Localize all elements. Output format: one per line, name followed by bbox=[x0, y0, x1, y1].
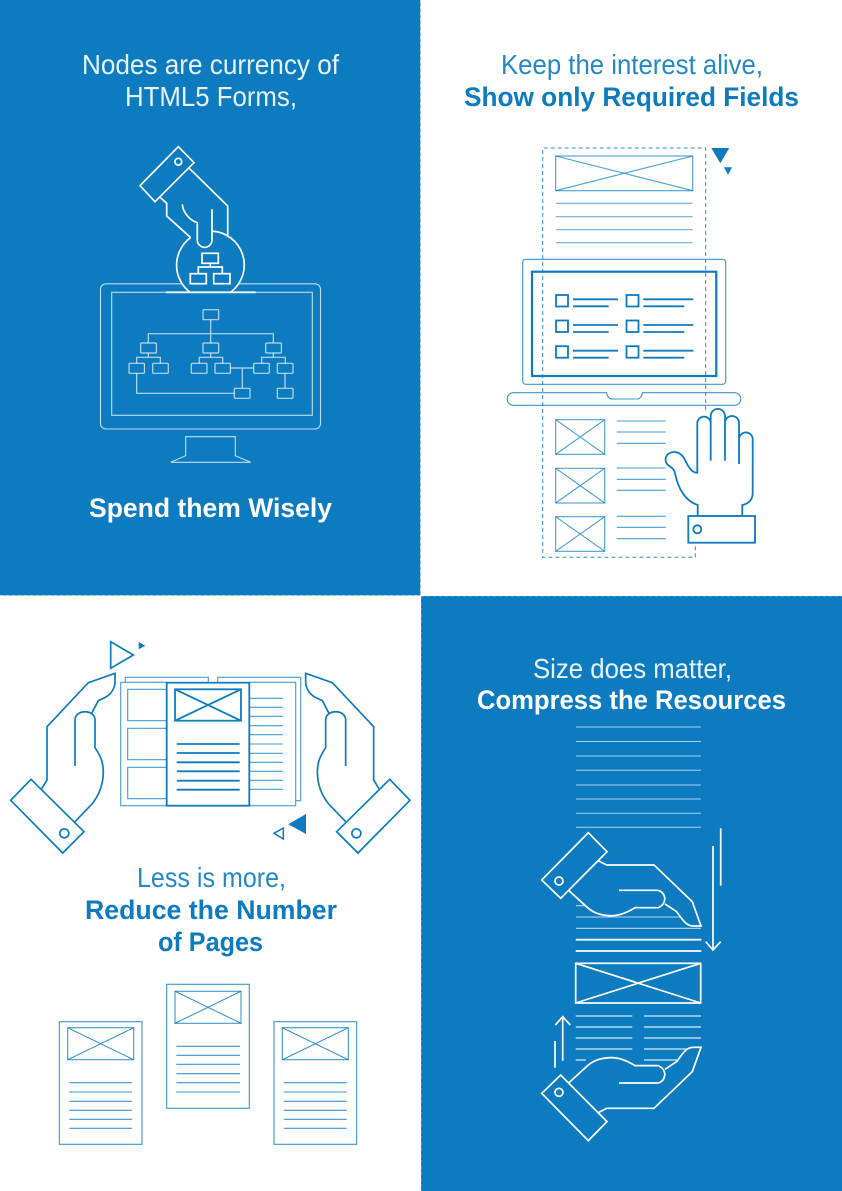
heading: required fields bbox=[464, 49, 799, 112]
chart: org tree on screen bbox=[129, 310, 293, 398]
panel: compress resources bbox=[421, 596, 842, 1191]
heading: fewer pages: of Pages bbox=[158, 927, 263, 957]
icon: left page bbox=[59, 1022, 142, 1144]
heading: nodes are currency: HTML5 Forms, bbox=[125, 81, 297, 112]
icon: stop hand bbox=[666, 409, 755, 543]
heading: compress: Compress the Resources bbox=[477, 685, 786, 715]
illustration: three separate pages bbox=[59, 984, 357, 1144]
icon: top text lines bbox=[576, 727, 701, 827]
heading: spend wisely: Spend them Wisely bbox=[89, 493, 332, 523]
icon: image placeholder bbox=[576, 963, 701, 1003]
icon: monitor bbox=[100, 284, 320, 462]
icon: hand with cuff bbox=[140, 147, 228, 247]
illustration: hands holding stacked pages bbox=[11, 642, 410, 853]
icon: right hand bbox=[306, 673, 410, 853]
panel: show required fields bbox=[464, 49, 799, 557]
heading: nodes are currency: Nodes are currency of bbox=[82, 49, 339, 80]
icon: form on screen bbox=[532, 272, 716, 376]
icon: compressed lines bbox=[576, 906, 701, 951]
icon: lower list with thumbnails bbox=[556, 420, 666, 551]
arrow: down bbox=[706, 828, 721, 950]
icon: two column lines bbox=[576, 1016, 701, 1060]
icon: right page bbox=[274, 1022, 357, 1144]
illustration: hand dropping node into monitor bbox=[100, 147, 320, 462]
icon: dashed page boundary bbox=[543, 148, 706, 557]
panel: reduce pages bbox=[11, 642, 410, 1144]
icon: bottom hand bbox=[542, 1047, 701, 1141]
heading: required fields: Show only Required Fields bbox=[464, 82, 799, 112]
icon: triangles bbox=[111, 642, 306, 839]
icon: node coin bbox=[177, 231, 244, 292]
heading: required fields: Keep the interest alive, bbox=[501, 49, 763, 80]
panel: nodes are currency bbox=[0, 0, 420, 596]
icon: header image placeholder bbox=[556, 156, 693, 243]
heading: nodes are currency bbox=[82, 49, 339, 112]
icon: centre page bbox=[167, 984, 249, 1108]
icon: top hand bbox=[542, 833, 701, 926]
icon: slot bar bbox=[166, 291, 256, 293]
heading: compress: Size does matter, bbox=[533, 653, 732, 684]
illustration: long form behind laptop bbox=[507, 148, 755, 557]
icon: back pages bbox=[121, 677, 301, 806]
heading: compress bbox=[477, 653, 786, 715]
icon: front page bbox=[167, 683, 249, 806]
heading: fewer pages: Less is more, bbox=[137, 862, 286, 893]
heading: fewer pages: Reduce the Number bbox=[85, 895, 337, 925]
icon: laptop bbox=[507, 259, 741, 405]
arrow: up bbox=[555, 1017, 570, 1068]
icon: left hand bbox=[11, 673, 115, 853]
illustration: hands compressing page bbox=[542, 727, 721, 1141]
icon: filled triangles bbox=[711, 148, 732, 175]
heading: fewer pages bbox=[85, 862, 337, 957]
